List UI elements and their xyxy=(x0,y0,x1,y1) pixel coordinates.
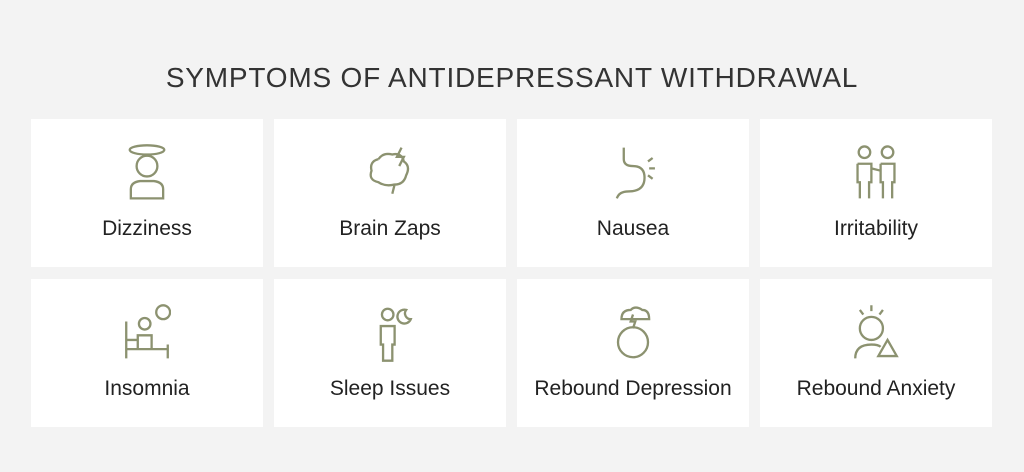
icon: cloud head xyxy=(616,306,650,358)
card: insomnia xyxy=(31,279,263,427)
icon: dizzy head xyxy=(128,144,166,200)
card: sleep issues xyxy=(274,279,506,427)
card: dizziness: Dizziness xyxy=(102,217,192,240)
card: sleep issues: Sleep Issues xyxy=(330,377,450,400)
icon: bed xyxy=(125,304,171,358)
card: rebound depression: Rebound Depression xyxy=(534,377,732,400)
icon: brain xyxy=(370,147,410,194)
card: nausea: Nausea xyxy=(597,217,669,240)
title: SYMPTOMS OF ANTIDEPRESSANT WITHDRAWAL xyxy=(166,62,858,93)
card: irritability xyxy=(760,119,992,267)
card: insomnia: Insomnia xyxy=(104,377,190,400)
card: rebound depression xyxy=(517,279,749,427)
card: rebound anxiety: Rebound Anxiety xyxy=(797,377,955,400)
card: rebound anxiety xyxy=(760,279,992,427)
icon: anxious head xyxy=(854,305,899,358)
icon: stomach xyxy=(616,148,655,199)
card: brain zaps: Brain Zaps xyxy=(339,217,441,240)
card: brain zaps xyxy=(274,119,506,267)
card: dizziness xyxy=(31,119,263,267)
card: irritability: Irritability xyxy=(834,217,918,240)
icon: two people xyxy=(856,145,896,198)
icon: person with moon xyxy=(380,308,412,362)
card: nausea xyxy=(517,119,749,267)
